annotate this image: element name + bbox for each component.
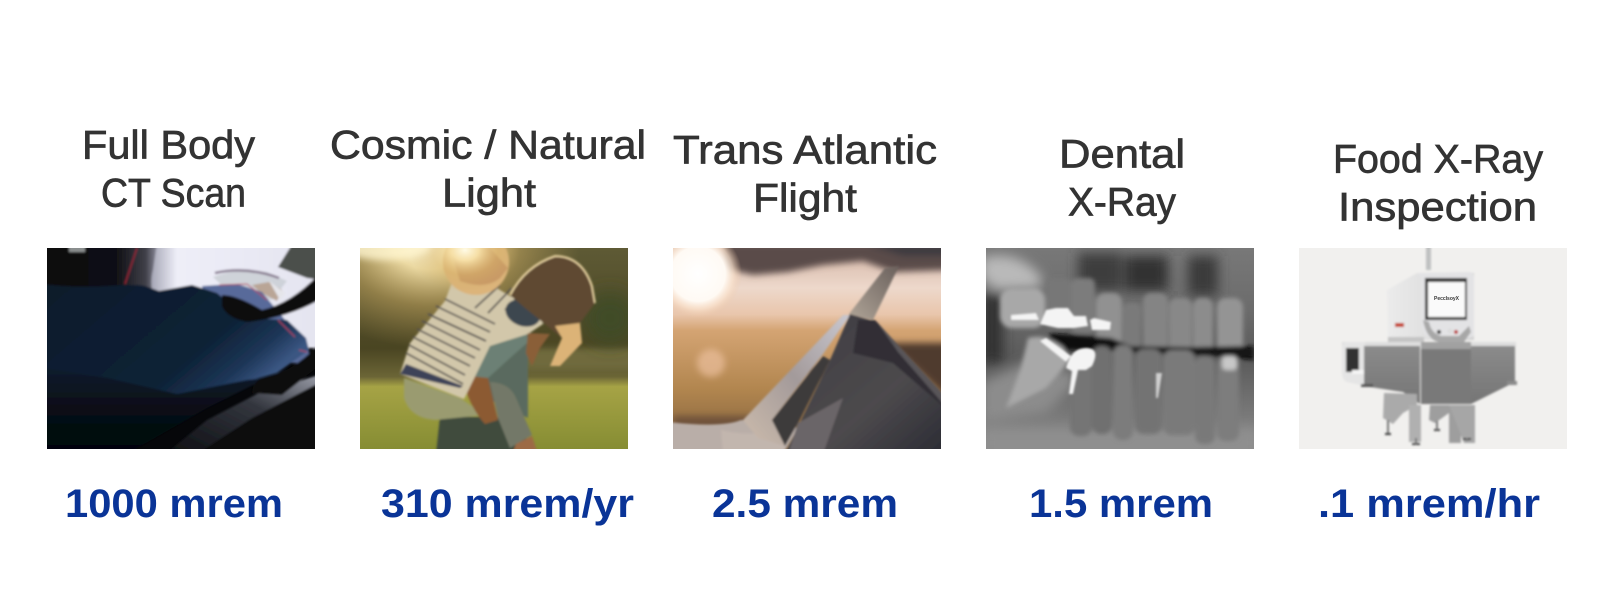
heading: Cosmic / Natural Light: [330, 124, 646, 216]
heading: Cosmic / Natural Light: Cosmic / Natural: [330, 124, 646, 168]
photo: patient in CT scanner: [47, 248, 315, 449]
value: .1 mrem/hr: .1 mrem/hr: [1318, 482, 1540, 526]
heading: Full Body CT Scan: Full Body: [82, 124, 255, 168]
photo: airplane wing at sunset: [673, 248, 941, 449]
heading: Cosmic / Natural Light: Light: [442, 172, 536, 216]
panel: full body CT scan: [42, 124, 322, 526]
value: 310 mrem/yr: 310 mrem/yr: [381, 482, 634, 526]
heading: Trans Atlantic Flight: [673, 128, 937, 220]
heading: Full Body CT Scan: [82, 124, 255, 216]
heading: Food X-Ray Inspection: Food X-Ray: [1333, 138, 1543, 182]
photo: children in sunlight: [360, 248, 628, 449]
heading: Trans Atlantic Flight: Trans Atlantic: [673, 128, 937, 172]
panel: dental x-ray: [981, 132, 1261, 526]
label: machine screen logo: PeccIsoyX: [1434, 296, 1460, 302]
photo: dental x-ray image: [986, 248, 1254, 449]
panel: cosmic / natural light: [280, 124, 646, 526]
value: 1.5 mrem: 1.5 mrem: [1029, 482, 1213, 526]
heading: Dental X-Ray: [1059, 132, 1185, 224]
value: 1000 mrem: 1000 mrem: [65, 482, 283, 526]
value: 2.5 mrem: 2.5 mrem: [712, 482, 898, 526]
photo: food x-ray inspection machine: [1299, 248, 1567, 449]
heading: Food X-Ray Inspection: [1333, 138, 1543, 230]
heading: Trans Atlantic Flight: Flight: [753, 176, 857, 220]
heading: Full Body CT Scan: CT Scan: [101, 172, 246, 216]
panel: food x-ray inspection: [1299, 138, 1567, 526]
heading: Dental X-Ray: Dental: [1059, 132, 1185, 176]
heading: Food X-Ray Inspection: Inspection: [1338, 186, 1537, 230]
panel: trans atlantic flight: [654, 128, 948, 526]
heading: Dental X-Ray: X-Ray: [1068, 180, 1176, 224]
icon: fillings and post: [1011, 308, 1162, 398]
